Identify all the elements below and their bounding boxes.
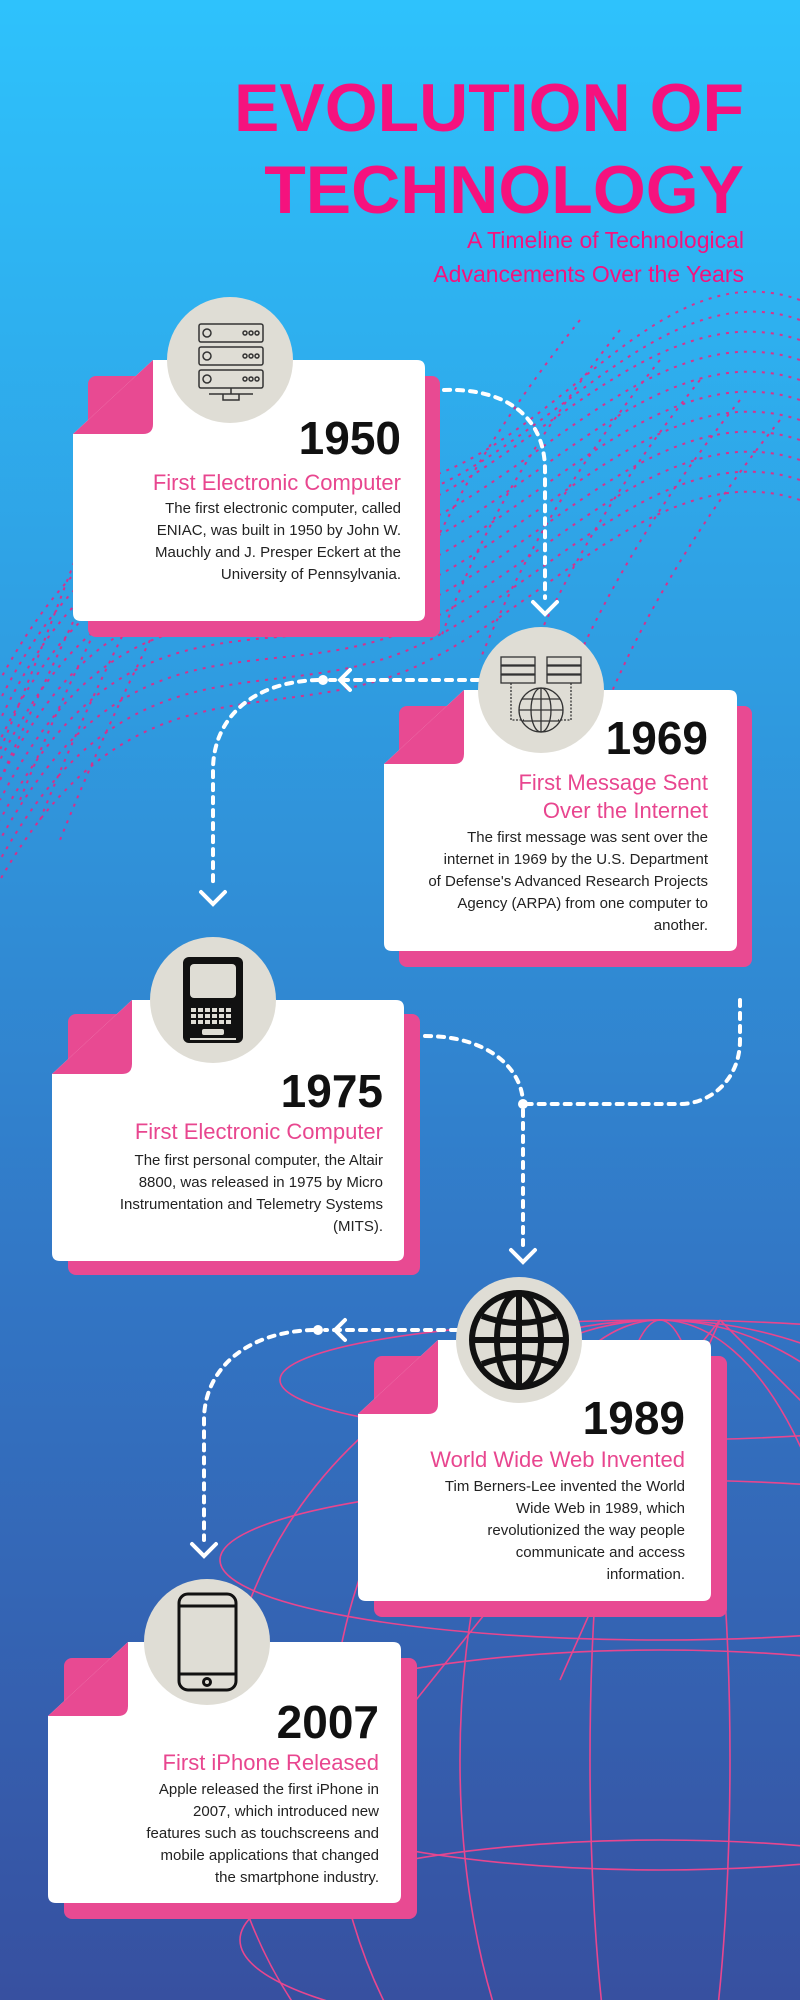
- body text: 8800, was released in 1975 by Micro: [139, 1174, 383, 1191]
- connector arrow 1989 to 2007: [192, 1320, 457, 1556]
- body text: [445, 1478, 685, 1583]
- body text: (MITS).: [333, 1218, 383, 1235]
- body text: The first message was sent over the: [467, 829, 708, 846]
- heading: First iPhone Released: [163, 1750, 379, 1775]
- heading: [518, 770, 708, 823]
- decorative dotted wave pattern: [0, 292, 800, 880]
- heading: First Electronic Computer: [135, 1119, 383, 1144]
- body text: communicate and access: [516, 1544, 685, 1561]
- body text: [146, 1781, 379, 1886]
- body text: Tim Berners-Lee invented the World: [445, 1478, 685, 1495]
- year: 1989: [583, 1392, 685, 1444]
- body text: [428, 829, 709, 934]
- icon: server: [167, 297, 293, 423]
- card: 1950: [73, 297, 440, 637]
- body text: information.: [607, 1566, 685, 1583]
- body text: 2007, which introduced new: [193, 1803, 379, 1820]
- connector arrow 1950 to 1969: [444, 390, 557, 614]
- card: 1989: [358, 1277, 727, 1617]
- year: 2007: [277, 1696, 379, 1748]
- card: 1975: [52, 937, 420, 1275]
- subtitle: Advancements Over the Years: [433, 261, 744, 287]
- body text: Mauchly and J. Presper Eckert at the: [155, 544, 401, 561]
- year: 1975: [281, 1065, 383, 1117]
- body text: Agency (ARPA) from one computer to: [457, 895, 708, 912]
- body text: Instrumentation and Telemetry Systems: [120, 1196, 383, 1213]
- icon: servers and globe: [478, 627, 604, 753]
- body text: The first personal computer, the Altair: [135, 1152, 383, 1169]
- title: EVOLUTION OF: [234, 70, 744, 146]
- connector arrow 1975 to 1989: [425, 1000, 740, 1262]
- body text: [155, 500, 401, 583]
- heading: Over the Internet: [543, 798, 708, 823]
- year: 1950: [299, 412, 401, 464]
- year: 1969: [606, 712, 708, 764]
- body text: University of Pennsylvania.: [221, 566, 401, 583]
- body text: Wide Web in 1989, which: [516, 1500, 685, 1517]
- body text: ENIAC, was built in 1950 by John W.: [157, 522, 401, 539]
- subtitle: A Timeline of Technological: [467, 227, 744, 253]
- body text: features such as touchscreens and: [146, 1825, 379, 1842]
- body text: of Defense's Advanced Research Projects: [428, 873, 708, 890]
- heading: First Electronic Computer: [153, 470, 401, 495]
- heading: First Message Sent: [518, 770, 708, 795]
- body text: mobile applications that changed: [161, 1847, 379, 1864]
- subtitle: [433, 227, 744, 287]
- body text: internet in 1969 by the U.S. Department: [444, 851, 709, 868]
- icon: globe: [456, 1277, 582, 1403]
- body text: the smartphone industry.: [215, 1869, 379, 1886]
- icon: phone: [144, 1579, 270, 1705]
- card: 2007: [48, 1579, 417, 1919]
- icon: computer terminal: [150, 937, 276, 1063]
- body text: The first electronic computer, called: [165, 500, 401, 517]
- heading: World Wide Web Invented: [430, 1447, 685, 1472]
- decorative globe wireframe: [220, 1320, 800, 2000]
- body text: another.: [654, 917, 708, 934]
- body text: Apple released the first iPhone in: [159, 1781, 379, 1798]
- card: 1969: [384, 627, 752, 967]
- connector arrow 1969 to 1975: [201, 670, 478, 904]
- body text: [120, 1152, 383, 1235]
- title: [234, 70, 744, 228]
- title: TECHNOLOGY: [264, 152, 744, 228]
- body text: revolutionized the way people: [487, 1522, 685, 1539]
